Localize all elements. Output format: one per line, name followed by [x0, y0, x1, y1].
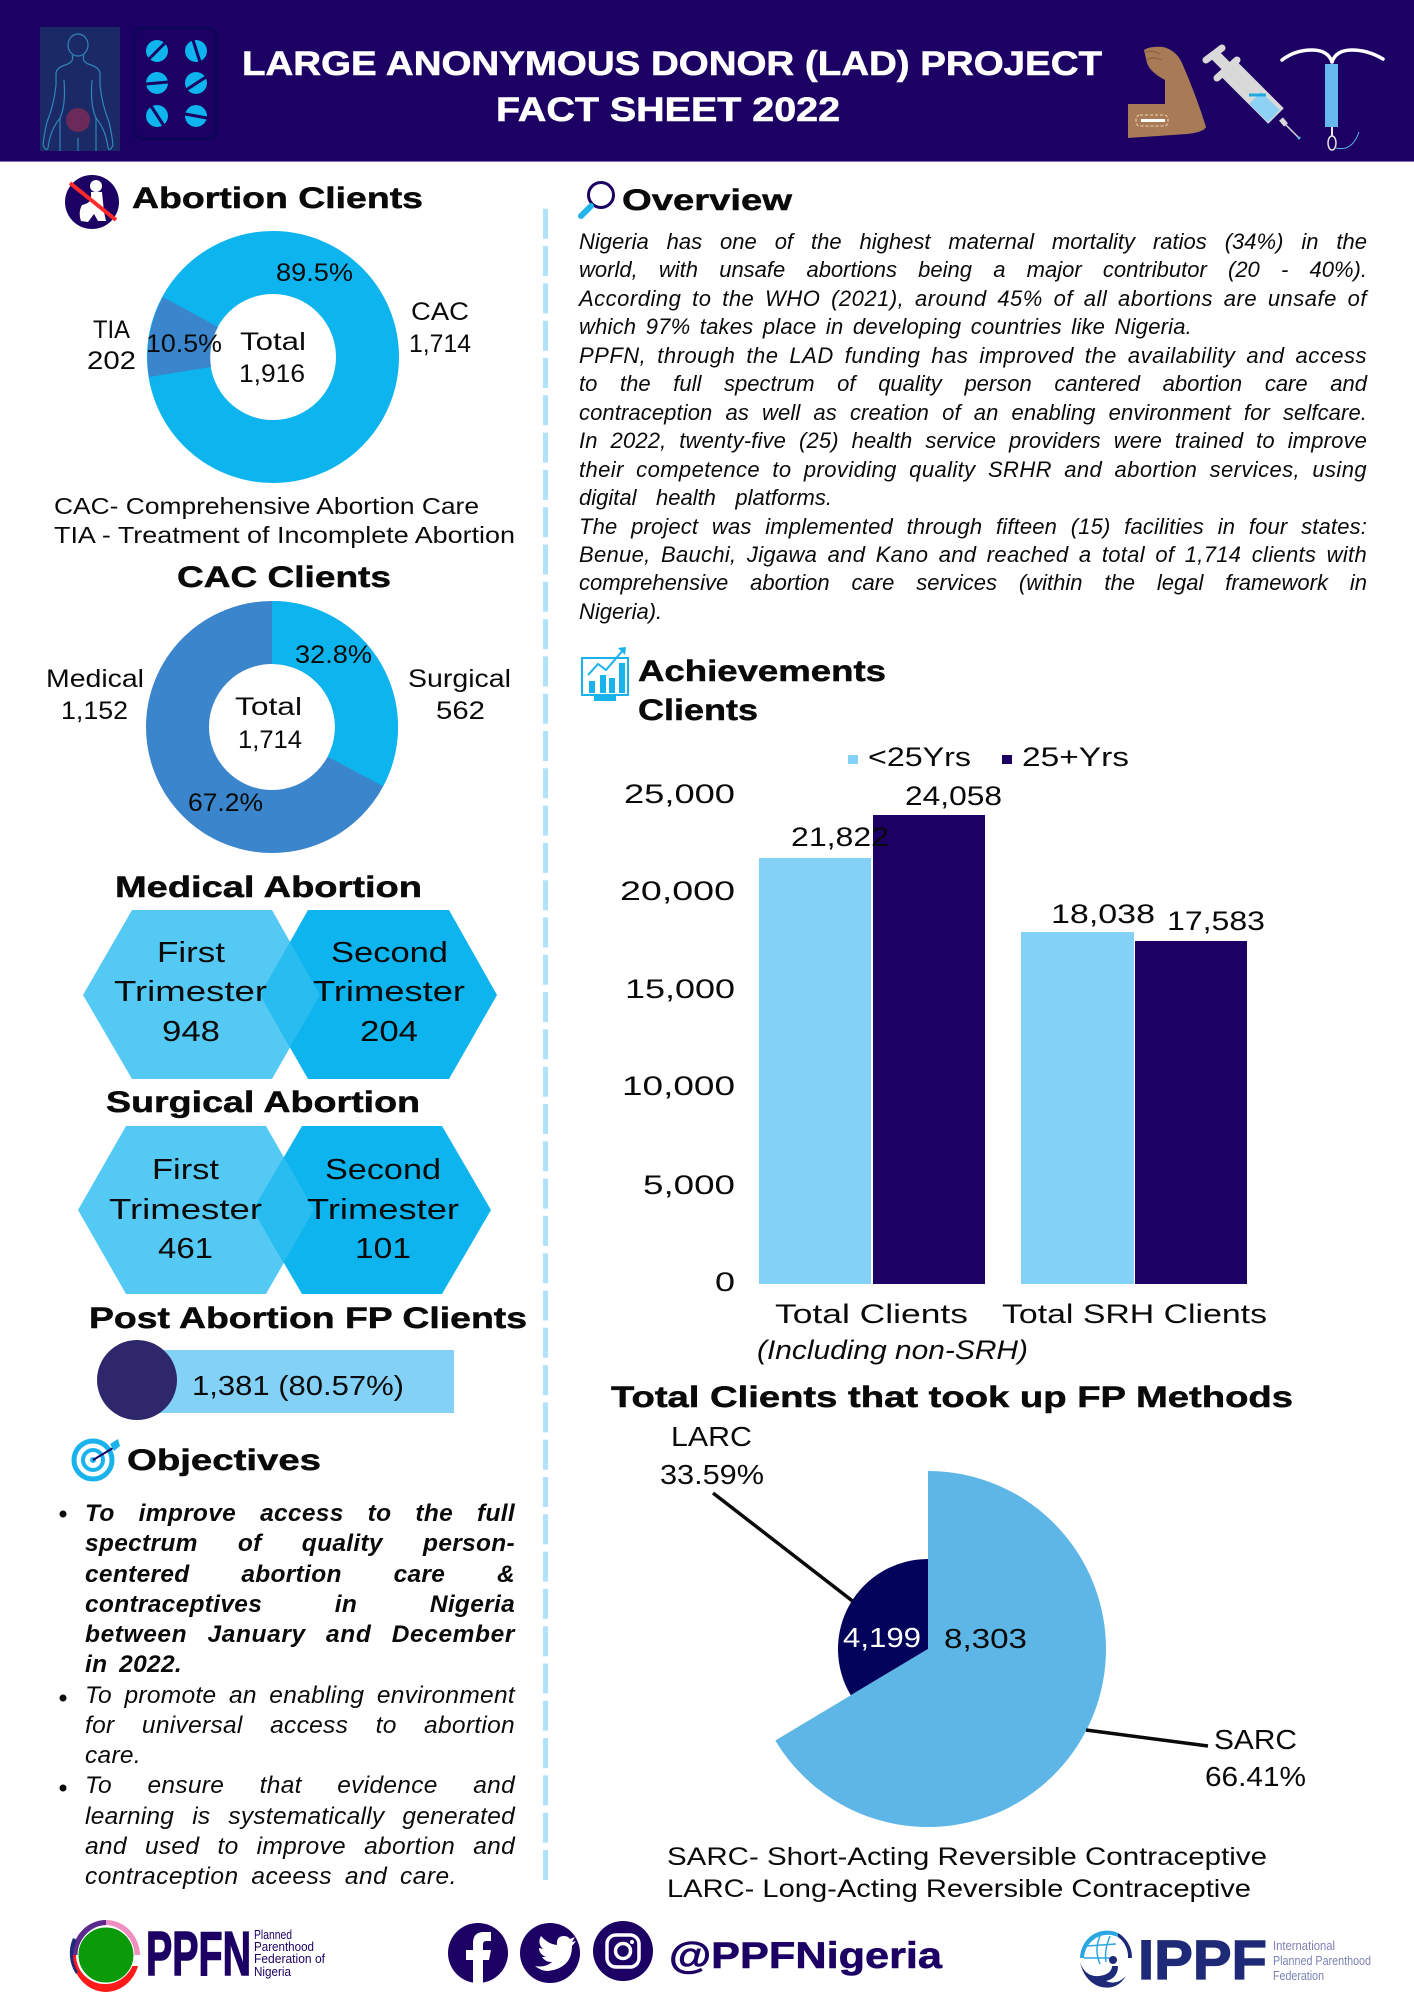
donut chart: CAC clients	[46, 601, 511, 822]
abbreviations: CAC and TIA: CAC- Comprehensive Abortion Care	[54, 493, 479, 519]
donut chart: CAC clients: 32.8%	[295, 641, 372, 669]
text block: overview: which 97% takes place in developing countries like Nigeria.	[579, 314, 1192, 339]
abbreviations: CAC and TIA: TIA - Treatment of Incomplete Abortion	[54, 522, 515, 548]
text block: overview: Nigeria).	[579, 599, 662, 624]
logo: PPFN: Planned	[254, 1927, 292, 1942]
pie chart: FP methods: SARC	[1214, 1724, 1297, 1755]
text block: objectives: learning is systematically generated	[85, 1802, 515, 1830]
bar values: 21,822	[791, 822, 889, 852]
heading: objectives: Objectives	[127, 1444, 321, 1477]
heading: post abortion FP clients: Post Abortion FP Clients	[89, 1302, 527, 1335]
hexagons: surgical abortion: Second	[325, 1154, 441, 1186]
donut chart: CAC clients: 562	[436, 697, 485, 725]
hexagons: surgical abortion: 461	[158, 1233, 213, 1265]
donut chart: abortion clients: 1,916	[239, 360, 305, 388]
text block: overview: According to the WHO (2021), around 45% of all abortions are unsafe of	[579, 286, 1367, 311]
logo: IPPF: IPPF	[1138, 1928, 1267, 1991]
pie chart: FP methods: 66.41%	[1205, 1761, 1306, 1792]
heading: achievements clients: Clients	[638, 694, 758, 727]
hexagons: medical abortion	[83, 910, 497, 1079]
text block: objectives: between January and December	[85, 1621, 515, 1648]
logo: PPFN: Parenthood	[254, 1939, 314, 1954]
icon: facebook	[448, 1923, 508, 1983]
donut chart: CAC clients: 1,152	[61, 697, 128, 725]
bars	[759, 815, 1247, 1284]
hexagons: surgical abortion: Trimester	[307, 1194, 459, 1226]
text block: overview: In 2022, twenty-five (25) health service providers were trained to improve	[579, 428, 1367, 453]
pie chart: FP methods: LARC	[671, 1421, 752, 1452]
donut chart: CAC clients: Total	[235, 693, 302, 721]
text block: objectives: and used to improve abortion and	[85, 1833, 515, 1860]
text block: overview: PPFN, through the LAD funding has improved the availability and access	[579, 343, 1367, 368]
text block: overview: Nigeria has one of the highest maternal mortality ratios (34%) in the	[579, 229, 1367, 254]
icon: pill blister pack	[134, 28, 216, 139]
donut chart: CAC clients: Surgical	[408, 665, 511, 693]
y axis labels: 0	[715, 1267, 735, 1297]
icon: target	[74, 1439, 120, 1479]
objectives bullets	[60, 1510, 66, 1792]
logo: IPPF: International	[1273, 1938, 1335, 1953]
icon: magnifier	[581, 182, 614, 216]
abbreviations: CAC and TIA	[54, 493, 515, 548]
text block: overview: The project was implemented through fifteen (15) facilities in four states:	[579, 514, 1367, 539]
icon: no abortion	[65, 175, 119, 229]
category labels: (Including non-SRH)	[757, 1335, 1028, 1365]
icon: twitter	[520, 1923, 580, 1983]
donut chart: abortion clients: 89.5%	[276, 259, 353, 287]
y axis labels	[620, 779, 735, 1297]
text block: objectives: contraceptives in Nigeria	[85, 1591, 515, 1618]
donut chart: abortion clients: 1,714	[409, 330, 471, 358]
bar values: 17,583	[1167, 906, 1265, 936]
donut chart: abortion clients: TIA	[93, 316, 130, 344]
hexagons: medical abortion: Trimester	[114, 976, 267, 1008]
heading: achievements clients: Achievements	[638, 655, 886, 688]
category labels	[757, 1299, 1267, 1365]
legend	[848, 742, 1129, 772]
logo: PPFN: Nigeria	[254, 1964, 292, 1979]
hexagons: surgical abortion	[78, 1126, 491, 1294]
donut chart: abortion clients: 202	[87, 347, 136, 375]
pie chart: FP methods: 33.59%	[660, 1459, 764, 1490]
donut chart: abortion clients: 10.5%	[146, 330, 222, 358]
header banner	[0, 0, 1414, 162]
abbreviations: SARC and LARC: SARC- Short-Acting Reversible Contraceptive	[667, 1843, 1267, 1871]
bar chart: clients	[620, 742, 1267, 1365]
y axis labels: 10,000	[622, 1071, 735, 1101]
donut chart: abortion clients: CAC	[411, 298, 469, 326]
text block: objectives: To promote an enabling environment	[85, 1682, 515, 1708]
heading: abortion clients: Abortion Clients	[132, 182, 423, 215]
text block: overview	[578, 229, 1368, 624]
pie chart: FP methods	[660, 1421, 1306, 1827]
y axis labels: 5,000	[643, 1170, 735, 1200]
icon: body outline	[40, 27, 120, 151]
hexagons: medical abortion: Second	[331, 937, 448, 969]
legend: 25+Yrs	[1022, 742, 1129, 772]
donut chart: CAC clients: 1,714	[238, 726, 302, 754]
icon: arm with implant	[1128, 47, 1206, 138]
bar values: 18,038	[1051, 899, 1155, 929]
logo: PPFN: Federation of	[254, 1951, 325, 1966]
donut chart: abortion clients: Total	[240, 328, 306, 356]
icon: instagram	[593, 1921, 653, 1981]
text block: objectives: To improve access to the full	[85, 1500, 515, 1527]
logo: PPFN	[70, 1920, 325, 1992]
text block: overview: their competence to providing quality SRHR and abortion services, using	[579, 457, 1367, 482]
divider	[543, 204, 548, 1880]
logo: IPPF: Planned Parenthood	[1273, 1953, 1371, 1968]
text block: objectives: spectrum of quality person-	[85, 1530, 515, 1557]
bar values	[791, 781, 1265, 936]
text block: objectives: for universal access to abortion	[85, 1712, 515, 1739]
donut chart: abortion clients	[87, 259, 471, 452]
hexagons: medical abortion: 204	[360, 1016, 418, 1048]
heading: FP methods: Total Clients that took up FP Methods	[611, 1381, 1293, 1414]
text block: overview: Benue, Bauchi, Jigawa and Kano and reached a total of 1,714 clients with	[579, 542, 1367, 567]
pie chart: FP methods: 8,303	[944, 1623, 1027, 1654]
donut chart: CAC clients: Medical	[46, 665, 144, 693]
abbreviations: SARC and LARC: LARC- Long-Acting Reversible Contraceptive	[667, 1875, 1251, 1903]
progress bar: post abortion FP	[97, 1340, 454, 1420]
text block: overview: to the full spectrum of quality person cantered abortion care and	[579, 371, 1367, 396]
logo: IPPF: Federation	[1273, 1968, 1324, 1983]
text block: objectives: care.	[85, 1742, 141, 1769]
heading: achievements clients	[638, 655, 886, 727]
icon: achievements chart monitor	[582, 647, 628, 701]
text block: objectives: contraception aceess and care.	[85, 1863, 457, 1890]
heading: medical abortion: Medical Abortion	[115, 871, 422, 904]
category labels: Total Clients	[775, 1299, 968, 1329]
donut chart: CAC clients: 67.2%	[188, 789, 263, 817]
hexagons: surgical abortion: Trimester	[109, 1194, 262, 1226]
heading: CAC clients: CAC Clients	[177, 561, 391, 594]
progress bar: post abortion FP: 1,381 (80.57%)	[192, 1370, 404, 1401]
logo: IPPF	[1080, 1928, 1371, 1991]
legend: <25Yrs	[868, 742, 971, 772]
icon: syringe	[1206, 48, 1300, 140]
logo: PPFN: PPFN	[146, 1920, 251, 1989]
hexagons: medical abortion: 948	[162, 1016, 220, 1048]
text block: overview: world, with unsafe abortions being a major contributor (20 - 40%).	[579, 257, 1367, 282]
heading: overview: Overview	[622, 184, 793, 217]
hexagons: medical abortion: First	[157, 937, 225, 969]
title: FACT SHEET 2022	[496, 91, 840, 129]
heading: surgical abortion: Surgical Abortion	[106, 1086, 420, 1119]
text block: overview: comprehensive abortion care services (within the legal framework in	[579, 570, 1367, 595]
text block: objectives: To ensure that evidence and	[85, 1772, 515, 1799]
y axis labels: 25,000	[624, 779, 735, 809]
hexagons: medical abortion: Trimester	[313, 976, 465, 1008]
category labels: Total SRH Clients	[1002, 1299, 1267, 1329]
hexagons: surgical abortion: First	[152, 1154, 219, 1186]
hexagons: surgical abortion: 101	[355, 1233, 411, 1265]
social handle: @PPFNigeria	[669, 1935, 942, 1976]
title: LARGE ANONYMOUS DONOR (LAD) PROJECT	[242, 45, 1102, 83]
pie chart: FP methods: 4,199	[843, 1622, 921, 1653]
text block: objectives: centered abortion care &	[85, 1560, 515, 1588]
text block: objectives	[85, 1500, 516, 1890]
title	[242, 45, 1102, 129]
y axis labels: 15,000	[625, 974, 735, 1004]
icon: IUD	[1282, 50, 1383, 150]
text block: objectives: in 2022.	[85, 1651, 182, 1678]
text block: overview: contraception as well as creation of an enabling environment for selfcare.	[579, 400, 1367, 425]
bar values: 24,058	[905, 781, 1002, 811]
abbreviations: SARC and LARC	[667, 1843, 1267, 1903]
y axis labels: 20,000	[620, 876, 735, 906]
text block: overview: digital health platforms.	[579, 485, 832, 510]
